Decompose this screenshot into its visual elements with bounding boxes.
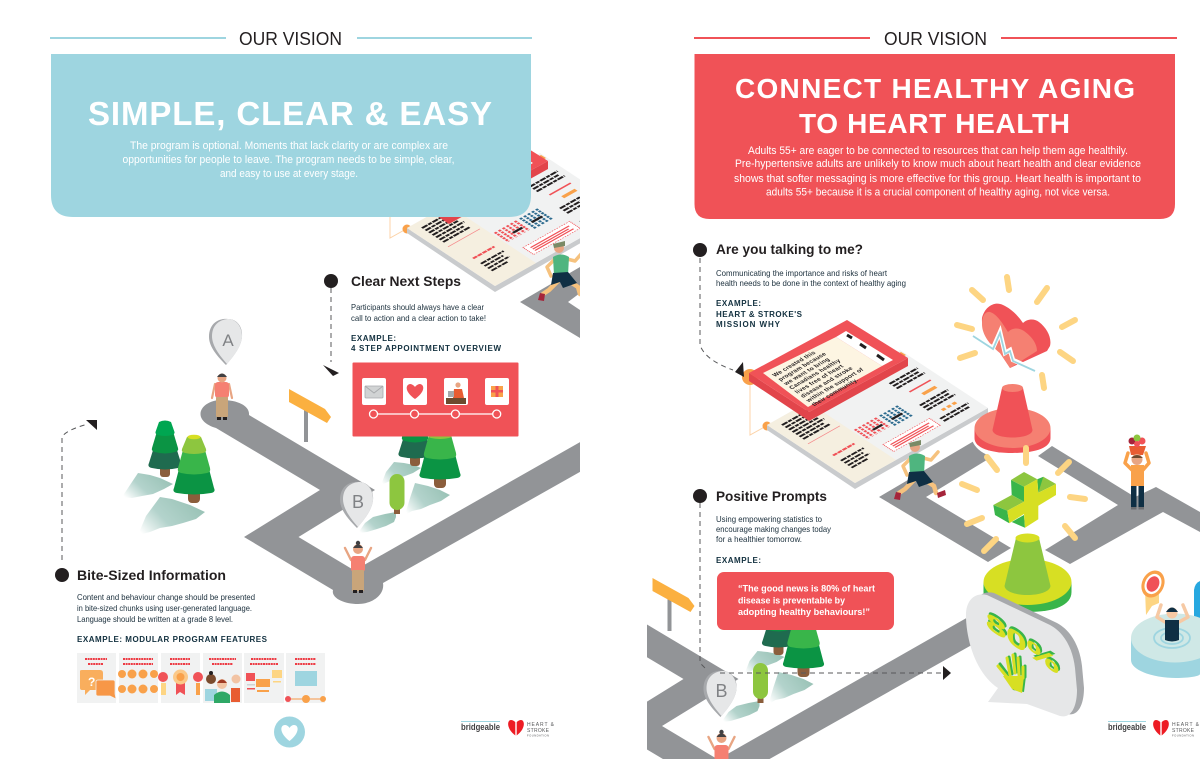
bite-sized information text: Bite-Sized Information <box>77 567 226 583</box>
clear next steps text: call to action and a clear action to take! <box>351 313 486 323</box>
trees <box>148 410 461 503</box>
mission why statement on tablet: disease and stroke <box>799 366 855 399</box>
marker dot <box>324 274 338 288</box>
runner <box>894 440 946 500</box>
vision rule right <box>357 37 532 39</box>
logo: heart and stroke: STROKE <box>527 728 550 734</box>
vision label: OUR VISION <box>239 29 342 49</box>
person at pin B <box>345 541 371 593</box>
pin B: B <box>715 681 728 701</box>
pin B: B <box>352 492 364 512</box>
icon: progress tracker <box>285 671 326 703</box>
logo: heart and stroke: STROKE <box>1172 728 1195 734</box>
bite-sized information text: Language should be written at a grade 8 level. <box>77 614 233 624</box>
are you talking to me text: health needs to be done in the context of healthy aging <box>716 278 906 288</box>
bite-sized information text <box>77 567 268 644</box>
heading: TO HEART HEALTH <box>799 108 1070 139</box>
speech bubble with 80 percent <box>966 592 1084 716</box>
person at pin B <box>708 730 734 759</box>
pin A: A <box>222 331 234 350</box>
trees <box>762 598 824 677</box>
icon: heart <box>407 384 423 399</box>
person in water <box>1154 605 1190 648</box>
icon: reward badges <box>158 670 203 695</box>
mission why statement on tablet: lives free of heart <box>793 364 846 395</box>
connector: clear next steps <box>323 288 339 376</box>
mission why statement on tablet: their community. <box>810 377 860 408</box>
heading card <box>51 54 531 217</box>
intro text <box>734 145 1141 198</box>
tree shadows <box>722 651 814 722</box>
marker dot <box>55 568 69 582</box>
isometric document <box>742 320 988 489</box>
are you talking to me text: EXAMPLE: <box>716 299 761 308</box>
icon: envelope <box>365 386 383 398</box>
appointment overview card <box>352 362 518 436</box>
icon: heart with pulse and rays <box>957 277 1075 371</box>
are you talking to me text: Communicating the importance and risks of heart <box>716 268 888 278</box>
logo: heart and stroke: HEART & <box>527 722 555 728</box>
quote callout <box>717 572 894 630</box>
person at start <box>212 374 232 420</box>
pin B <box>704 671 737 717</box>
80 percent figure <box>986 604 1061 681</box>
signpost <box>289 389 331 442</box>
quote callout: adopting healthy behaviours!” <box>738 607 870 618</box>
rays around plus <box>962 448 1085 551</box>
mission why statement on tablet <box>770 341 872 408</box>
bite-sized information text: EXAMPLE: MODULAR PROGRAM FEATURES <box>77 635 268 644</box>
panel: simple, clear and easy <box>50 29 628 748</box>
icon: speech bubbles: ? <box>88 675 95 689</box>
person carrying a basket <box>1125 434 1149 510</box>
intro text: opportunities for people to leave. The program needs to be simple, clear, <box>122 154 454 166</box>
mission why statement on tablet: We created this <box>771 350 818 378</box>
80 percent figure: 80% <box>988 604 1061 679</box>
are you talking to me text: MISSION WHY <box>716 320 781 329</box>
clear next steps text <box>351 273 501 353</box>
intro text: shows that softer messaging is more effective for this group. Heart health is important to <box>734 173 1141 185</box>
icon: community portraits <box>205 671 240 703</box>
are you talking to me text: Are you talking to me? <box>716 241 863 257</box>
logo: bridgeable: bridgeable <box>461 722 500 732</box>
award ribbon <box>1137 567 1169 615</box>
shrub <box>390 474 404 514</box>
logo: heart and stroke: HEART & <box>1172 722 1200 728</box>
intro text: and easy to use at every stage. <box>220 168 358 180</box>
vision rule left <box>694 37 870 39</box>
vision rule left <box>50 37 226 39</box>
positive prompts text: EXAMPLE: <box>716 556 761 565</box>
intro text: Adults 55+ are eager to be connected to resources that can help them age healthily. <box>748 145 1128 157</box>
pin B <box>340 482 373 528</box>
signpost <box>652 578 694 631</box>
step timeline <box>370 410 501 418</box>
icon: person at desk <box>446 382 466 404</box>
heading card <box>694 54 1175 219</box>
icon: multimedia tiles <box>246 670 282 692</box>
blue pedestal <box>1131 581 1200 678</box>
tree shadows <box>122 462 450 535</box>
upper road network <box>879 441 1200 564</box>
clear next steps text: Clear Next Steps <box>351 273 461 289</box>
mission why statement on tablet: we want to bring <box>781 357 832 387</box>
mission why statement on tablet: Canadians healthy <box>788 358 843 391</box>
quote callout: disease is preventable by <box>738 596 846 606</box>
intro text <box>122 140 454 180</box>
clear next steps text: EXAMPLE: <box>351 334 396 343</box>
intro text: The program is optional. Moments that lack clarity or are complex are <box>130 140 448 152</box>
connector: positive prompts <box>700 503 951 680</box>
road fragment near runner <box>520 267 580 338</box>
green cone <box>980 534 1074 618</box>
isometric document illustration <box>390 150 580 292</box>
bite-sized information text: Content and behaviour change should be presented <box>77 592 255 602</box>
icon: orange feature dots <box>118 670 158 694</box>
positive prompts text: Positive Prompts <box>716 488 827 504</box>
positive prompts text: for a healthier tomorrow. <box>716 534 802 544</box>
logo: heart and stroke <box>1153 719 1200 738</box>
clear next steps text: Participants should always have a clear <box>351 302 484 312</box>
clear next steps text: 4 STEP APPOINTMENT OVERVIEW <box>351 344 501 353</box>
icon: speech bubbles <box>80 670 116 699</box>
logo: heart and stroke <box>508 719 555 738</box>
connector: are you talking to me <box>700 258 744 377</box>
bite-sized information text: in bite-sized chunks using user-generated language. <box>77 603 252 613</box>
modular program feature cards <box>77 653 326 703</box>
intro text: adults 55+ because it is a crucial component of healthy aging, not vice versa. <box>766 186 1110 198</box>
marker dot <box>693 243 707 257</box>
vision rule right <box>1001 37 1177 39</box>
connector: bite-sized information <box>62 420 97 560</box>
lower road path <box>647 618 970 759</box>
vision label: OUR VISION <box>884 29 987 49</box>
red cone <box>972 384 1054 460</box>
logo: bridgeable: bridgeable <box>1108 722 1146 732</box>
mission why statement on tablet: program because <box>777 351 829 382</box>
are you talking to me text <box>716 241 906 329</box>
positive prompts text <box>716 488 832 565</box>
are you talking to me text: HEART & STROKE'S <box>716 310 803 319</box>
80 percent figure: 80% <box>986 606 1059 681</box>
mission why statement on tablet: within the support of <box>804 367 866 404</box>
icon: green plus <box>993 472 1056 528</box>
road path <box>201 400 610 604</box>
panel: connect healthy aging to heart health <box>647 32 1200 759</box>
icon: raised hand <box>998 654 1026 693</box>
logo: heart and stroke: FOUNDATION <box>1172 734 1194 738</box>
quote callout: “The good news is 80% of heart <box>738 584 876 594</box>
positive prompts text: encourage making changes today <box>716 524 832 534</box>
icon: gift <box>491 386 503 397</box>
shrub <box>753 663 768 703</box>
icon: heart badge <box>274 716 305 748</box>
pin A <box>209 319 242 365</box>
runner <box>538 241 580 301</box>
intro text: Pre-hypertensive adults are unlikely to know much about heart health and clear evidence <box>735 158 1141 170</box>
heart ray below <box>1042 375 1044 388</box>
logo: heart and stroke: FOUNDATION <box>527 734 549 738</box>
positive prompts text: Using empowering statistics to <box>716 514 822 524</box>
marker dot <box>693 489 707 503</box>
heading: SIMPLE, CLEAR & EASY <box>88 95 492 132</box>
heading: CONNECT HEALTHY AGING <box>735 73 1135 104</box>
heading <box>735 73 1135 139</box>
